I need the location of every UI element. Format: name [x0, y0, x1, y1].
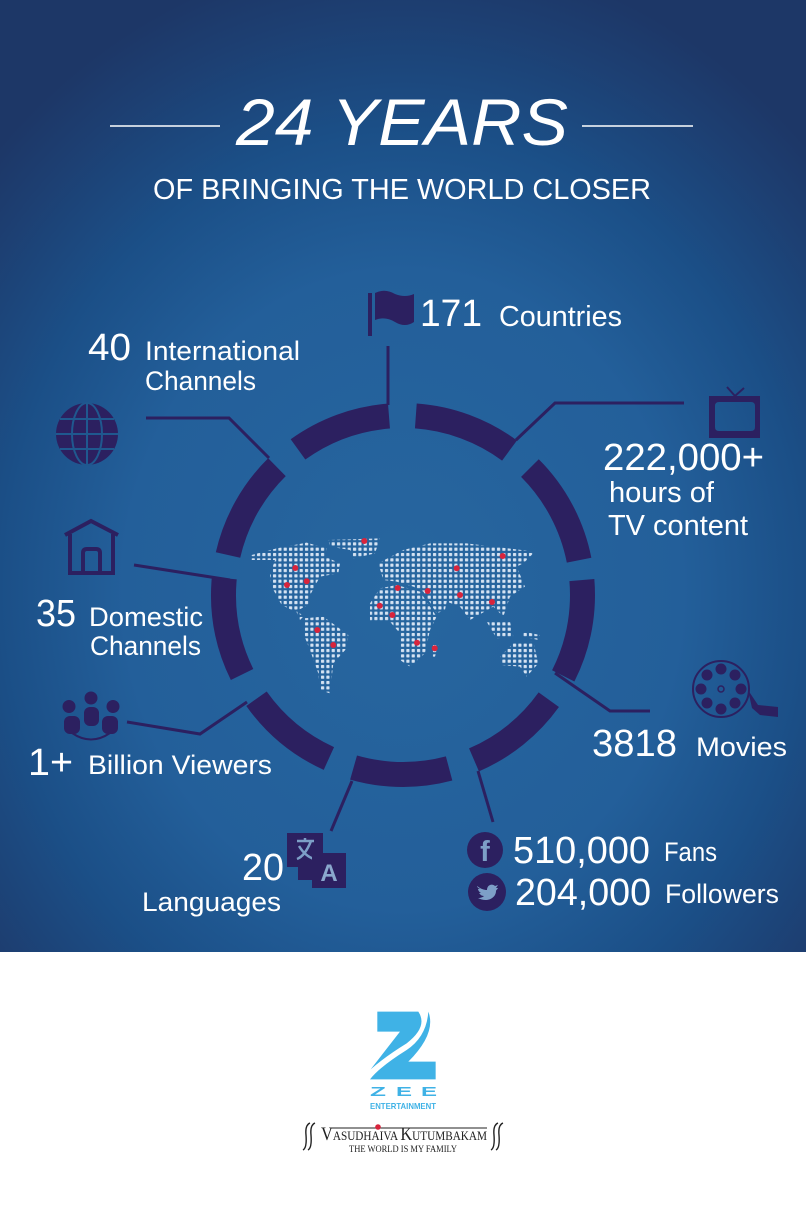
- location markers: [284, 538, 506, 651]
- stat: 222,000+ hours of TV content: 222,000+: [603, 437, 764, 479]
- logo: Zee Entertainment: Z: [370, 1084, 386, 1099]
- icon: translate: [287, 833, 346, 888]
- stat: 222,000+ hours of TV content: TV content: [608, 510, 748, 542]
- connector lines: [127, 346, 684, 831]
- stat: 171 countries: [420, 293, 622, 335]
- stat: 510,000 fans: Fans: [664, 837, 717, 867]
- icon: facebook: [467, 832, 503, 868]
- stat: 35 domestic channels: Domestic: [89, 602, 203, 632]
- icon: globe: [56, 403, 118, 465]
- stat: 35 domestic channels: [36, 593, 203, 661]
- stat: 3818 movies: 3818: [592, 723, 677, 765]
- tagline: Vasudhaiva Kutumbakam: VASUDHAIVA KUTUMBAKAM: [321, 1124, 487, 1145]
- stat: 222,000+ hours of TV content: hours of: [609, 477, 715, 509]
- stat: 40 international channels: International: [145, 336, 300, 366]
- stat: 35 domestic channels: 35: [36, 593, 76, 635]
- tagline: Vasudhaiva Kutumbakam: [303, 1123, 503, 1155]
- logo: Zee Entertainment: [370, 1012, 438, 1111]
- logo: Zee Entertainment: E: [396, 1084, 413, 1099]
- stat: 20 languages: [142, 847, 284, 917]
- stat: 204,000 followers: Followers: [665, 879, 779, 909]
- title: 24 YEARS: [235, 85, 568, 159]
- stat: 1+ billion viewers: 1+: [28, 742, 73, 784]
- icon: television: [709, 387, 760, 438]
- stat: 40 international channels: 40: [88, 327, 131, 369]
- stat: 510,000 fans: [513, 830, 717, 872]
- stat: 20 languages: Languages: [142, 887, 281, 917]
- stat: 171 countries: 171: [420, 293, 482, 335]
- icon: twitter: [468, 873, 506, 911]
- stat: 510,000 fans: 510,000: [513, 830, 650, 872]
- stat: 35 domestic channels: Channels: [90, 631, 201, 661]
- icon: translate: A: [320, 860, 338, 887]
- stat: 204,000 followers: 204,000: [515, 872, 651, 914]
- segmented ring: [211, 403, 595, 787]
- subtitle: OF BRINGING THE WORLD CLOSER: [153, 174, 651, 206]
- icon: film reel: [693, 661, 778, 717]
- icon: facebook: f: [480, 836, 490, 868]
- stat: 40 international channels: [88, 327, 300, 396]
- stat: 1+ billion viewers: [28, 742, 272, 784]
- panel: blue background: [0, 0, 806, 952]
- stat: 204,000 followers: [515, 872, 779, 914]
- stat: 20 languages: 20: [242, 847, 284, 889]
- stat: 3818 movies: [592, 723, 787, 765]
- logo: Zee Entertainment: ENTERTAINMENT: [370, 1101, 437, 1111]
- stat: 40 international channels: Channels: [145, 366, 256, 396]
- stat: 171 countries: Countries: [499, 301, 622, 333]
- stat: 1+ billion viewers: Billion Viewers: [88, 750, 272, 780]
- icon: house: [65, 521, 118, 573]
- icon: people: [62, 692, 120, 740]
- tagline: Vasudhaiva Kutumbakam: THE WORLD IS MY FAMILY: [349, 1145, 457, 1155]
- stat: 3818 movies: Movies: [696, 732, 787, 762]
- stat: 222,000+ hours of TV content: [603, 437, 764, 542]
- world map: [252, 538, 540, 693]
- logo: Zee Entertainment: E: [421, 1084, 438, 1099]
- icon: flag: [368, 291, 414, 336]
